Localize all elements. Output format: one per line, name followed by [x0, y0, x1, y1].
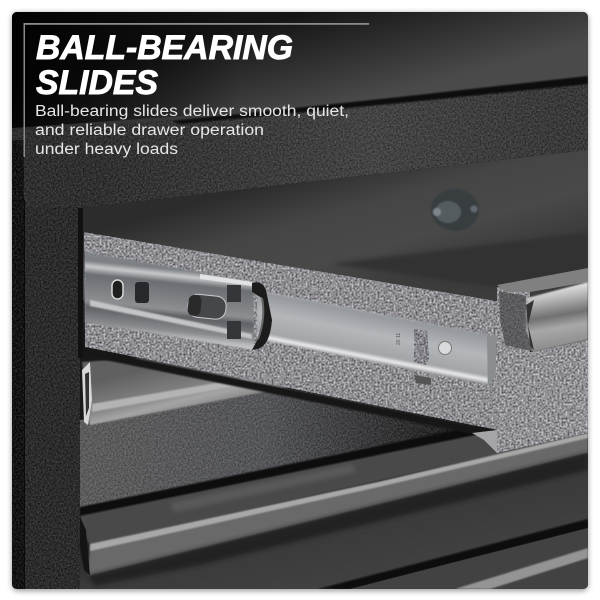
lower slit: [318, 519, 588, 589]
interior shelf tone: [339, 234, 586, 286]
drawer top lip: [497, 268, 588, 292]
rail hole: [438, 342, 452, 354]
description: and reliable drawer operation: [35, 122, 264, 139]
upper drawer textured front: [12, 82, 588, 215]
inner slide rail: [257, 290, 497, 386]
third drawer handle: [80, 433, 588, 586]
rail stamp: 20 11: [396, 333, 402, 345]
fourth drawer handle: [350, 528, 588, 589]
rail slot long: [187, 293, 227, 320]
lower cavity: [80, 330, 588, 589]
rail tab cutout: [414, 329, 429, 365]
interior knob: [431, 189, 479, 231]
cabinet post: [12, 140, 83, 589]
second drawer textured panel: [80, 385, 480, 508]
top chrome handle: [525, 282, 588, 352]
drawer side shadow at rail: [102, 358, 484, 434]
top left dark falloff: [12, 12, 203, 128]
description: under heavy loads: [35, 141, 178, 158]
rail slot left: [112, 280, 123, 299]
drawer front shaded top: [499, 291, 535, 352]
drawer bottom tab: [472, 430, 497, 453]
title: SLIDES: [36, 64, 158, 102]
ball bearing clip: [227, 282, 272, 350]
lower tab: [414, 375, 431, 385]
slit between upper fronts: [172, 76, 588, 124]
second drawer handle: [82, 358, 300, 425]
outer slide rail: [85, 252, 254, 350]
frame rule: [24, 23, 369, 157]
slit above third handle: [80, 430, 473, 514]
third drawer front: [80, 452, 588, 589]
title: BALL-BEARING: [36, 29, 293, 67]
cabinet interior: [80, 150, 588, 300]
description: Ball-bearing slides deliver smooth, quiet,: [35, 103, 349, 120]
rail slot centre: [135, 282, 149, 303]
drawer front panel: [497, 287, 588, 453]
drawer side panel: [84, 232, 497, 430]
upper drawer smooth face: [12, 12, 588, 130]
